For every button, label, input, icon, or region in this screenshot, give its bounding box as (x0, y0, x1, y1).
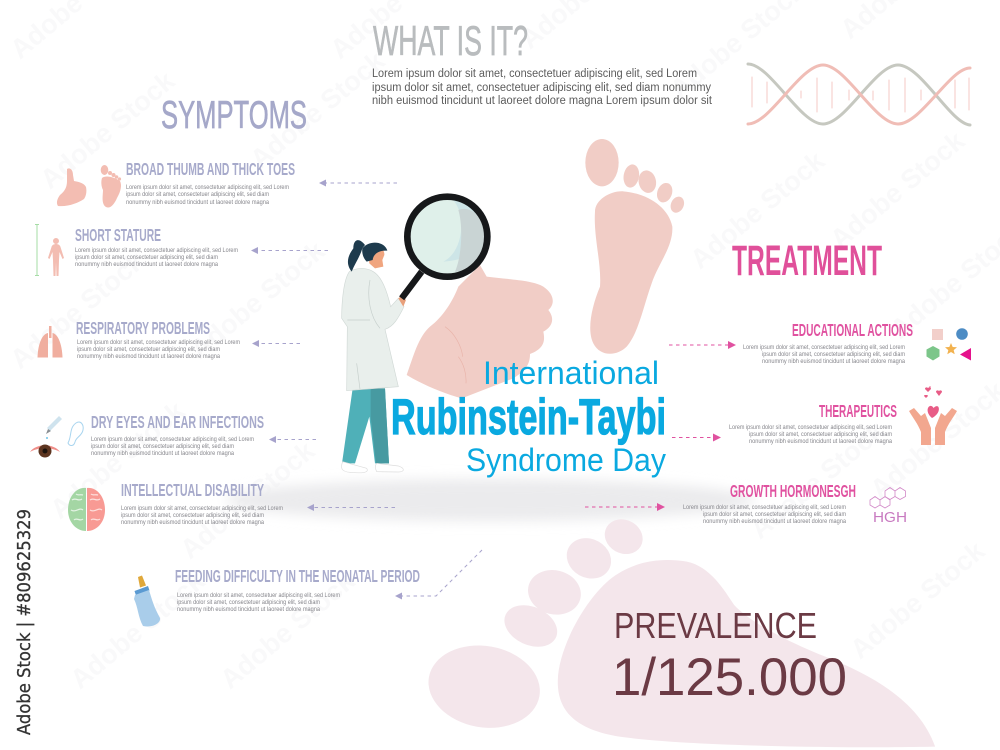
icon: eye drop and ear (30, 416, 83, 458)
body text: Lorem ipsum dolor sit amet, consectetuer adipiscing elit, sed Lorem (729, 424, 892, 431)
body text (121, 505, 283, 526)
ground shadow (225, 479, 755, 521)
watermark pattern: Adobe Stock (215, 565, 361, 695)
watermark pattern: Adobe Stock (845, 535, 991, 665)
icon: lungs (38, 326, 62, 358)
treatment: educational actions (743, 320, 971, 365)
illustration: big thumb (407, 265, 553, 398)
body text: ipsum dolor sit amet, consectetuer adipiscing elit, sed diam (121, 512, 264, 519)
body text: nonummy nibh euismod tincidunt ut laoreet dolore magna (126, 199, 269, 206)
body text: nonummy nibh euismod tincidunt ut laoreet dolore magna (749, 438, 892, 445)
icon: baby bottle (134, 576, 160, 626)
body text: Lorem ipsum dolor sit amet, consectetuer adipiscing elit, sed Lorem (743, 344, 905, 351)
heading: SHORT STATURE (75, 225, 161, 245)
heading: DRY EYES AND EAR INFECTIONS (91, 412, 264, 432)
arrow: symptom 6 (395, 550, 482, 600)
body text (91, 436, 254, 457)
body text: ipsum dolor sit amet, consectetuer adipiscing elit, sed diam (75, 254, 218, 261)
heading: INTELLECTUAL DISABILITY (121, 480, 264, 500)
watermark pattern: Adobe Stock (685, 145, 831, 275)
watermark pattern: Adobe Stock (825, 125, 971, 255)
body text: Lorem ipsum dolor sit amet, consectetuer adipiscing elit, sed Lorem (121, 505, 283, 512)
heading: GROWTH HORMONESGH (730, 481, 856, 501)
body text (177, 592, 340, 613)
heading: THERAPEUTICS (819, 401, 897, 421)
trousers (342, 388, 389, 463)
body text (126, 184, 289, 206)
arrow: treatment 1 (669, 341, 736, 349)
watermark pattern: Adobe Stock (45, 395, 191, 525)
arrow: symptom 3 (252, 340, 300, 347)
heading: BROAD THUMB AND THICK TOES (126, 159, 295, 179)
body text (75, 247, 238, 268)
watermark pattern: Adobe Stock (175, 435, 321, 565)
body text: nonummy nibh euismod tincidunt ut laoreet dolore magna (762, 358, 905, 365)
arrow: symptom 4 (269, 436, 316, 443)
hair (362, 243, 387, 262)
text block: what is it description: Lorem ipsum dolor sit amet, consectetuer adipiscing elit, sed Lorem (372, 68, 697, 80)
body text: ipsum dolor sit amet, consectetuer adipiscing elit, sed diam (91, 443, 234, 450)
watermark pattern: Adobe Stock (245, 45, 391, 175)
body text (743, 344, 905, 365)
body text: ipsum dolor sit amet, consectetuer adipiscing elit, sed diam (177, 599, 320, 606)
text block: what is it description: nibh euismod tincidunt ut laoreet dolore magna Lorem ipsum dolor sit (372, 95, 713, 107)
icon: HGH molecule (870, 488, 907, 526)
illustration: magnifying glass (402, 197, 487, 298)
icon: thumb and foot (57, 165, 121, 208)
title: International Rubinstein-Taybi Syndrome Day: Syndrome Day (466, 442, 666, 478)
watermark pattern: Adobe Stock (65, 565, 211, 695)
body text (77, 339, 240, 360)
watermark pattern: Adobe Stock (5, 245, 151, 375)
text block: what is it description: ipsum dolor sit amet, consectetuer adipiscing elit, sed diam nonummy (372, 82, 711, 94)
body text: Lorem ipsum dolor sit amet, consectetuer adipiscing elit, sed Lorem (91, 436, 254, 443)
arrow: symptom 5 (307, 504, 395, 511)
body text: nonummy nibh euismod tincidunt ut laoreet dolore magna (75, 261, 218, 268)
body text: nonummy nibh euismod tincidunt ut laoreet dolore magna (177, 606, 320, 613)
icon: height bracket and body (35, 224, 64, 276)
body text: nonummy nibh euismod tincidunt ut laoreet dolore magna (121, 519, 264, 526)
arrow: symptom 2 (251, 247, 328, 254)
icon: HGH molecule: HGH (873, 509, 907, 526)
face and hand (367, 246, 384, 268)
heading: EDUCATIONAL ACTIONS (792, 320, 913, 340)
body text: nonummy nibh euismod tincidunt ut laoreet dolore magna (77, 353, 220, 360)
body text: Lorem ipsum dolor sit amet, consectetuer adipiscing elit, sed Lorem (77, 339, 240, 346)
title: International Rubinstein-Taybi Syndrome Day: Rubinstein-Taybi (391, 389, 666, 445)
body text (683, 504, 846, 525)
body text: ipsum dolor sit amet, consectetuer adipiscing elit, sed diam (703, 511, 846, 518)
heading: FEEDING DIFFICULTY IN THE NEONATAL PERIOD (175, 566, 420, 586)
icon: coloured shapes (926, 328, 971, 360)
coat (342, 268, 404, 391)
body text: nonummy nibh euismod tincidunt ut laoreet dolore magna (703, 518, 846, 525)
icon: hands holding hearts (909, 386, 957, 445)
prevalence value: 1/125.000 (612, 648, 847, 707)
shoes (341, 462, 367, 473)
heading: RESPIRATORY PROBLEMS (76, 318, 210, 338)
watermark pattern: Adobe Stock (35, 65, 181, 195)
symptom: respiratory problems (38, 318, 240, 360)
body text: ipsum dolor sit amet, consectetuer adipiscing elit, sed diam (762, 351, 905, 358)
symptom: intellectual disability (68, 480, 283, 531)
treatment: therapeutics (729, 386, 957, 445)
title: what is it: WHAT IS IT? (373, 17, 528, 64)
body text: Lorem ipsum dolor sit amet, consectetuer adipiscing elit, sed Lorem (75, 247, 238, 254)
body text: Lorem ipsum dolor sit amet, consectetuer adipiscing elit, sed Lorem (126, 184, 289, 191)
heading: treatment: TREATMENT (732, 237, 882, 285)
symptom: feeding difficulty (134, 566, 420, 626)
symptom: dry eyes and ear infections (30, 412, 264, 458)
body text: Lorem ipsum dolor sit amet, consectetuer adipiscing elit, sed Lorem (683, 504, 846, 511)
arrow: treatment 3 (585, 503, 665, 511)
illustration: big foot (585, 139, 687, 354)
illustration: doctor with magnifier (341, 240, 406, 473)
arrow: symptom 1 (319, 180, 397, 186)
symptom: short stature (35, 224, 238, 276)
large pink footprint with prevalence backdrop (422, 513, 935, 747)
body text (729, 424, 892, 445)
watermark pattern: Adobe Stock (745, 415, 891, 545)
symptom: broad thumb and thick toes (57, 159, 295, 208)
prevalence label: PREVALENCE (614, 605, 817, 646)
body text: nonummy nibh euismod tincidunt ut laoreet dolore magna (91, 450, 234, 457)
watermark pattern: Adobe Stock (185, 235, 331, 365)
stock id caption: Adobe Stock | #809625329 (14, 509, 35, 735)
heading: symptoms: SYMPTOMS (161, 94, 307, 137)
body text: ipsum dolor sit amet, consectetuer adipiscing elit, sed diam (126, 191, 269, 198)
body text: ipsum dolor sit amet, consectetuer adipiscing elit, sed diam (77, 346, 220, 353)
treatment: growth hormones (683, 481, 907, 526)
icon: brain (68, 488, 105, 531)
title: International Rubinstein-Taybi Syndrome Day (391, 355, 666, 478)
central illustration (341, 139, 687, 473)
text block: what is it description (372, 68, 713, 107)
body text: ipsum dolor sit amet, consectetuer adipiscing elit, sed diam (749, 431, 892, 438)
body text: Lorem ipsum dolor sit amet, consectetuer adipiscing elit, sed Lorem (177, 592, 340, 599)
icon: DNA helix (748, 64, 970, 125)
title: International Rubinstein-Taybi Syndrome Day: International (483, 355, 659, 391)
arrow: treatment 2 (672, 434, 721, 442)
